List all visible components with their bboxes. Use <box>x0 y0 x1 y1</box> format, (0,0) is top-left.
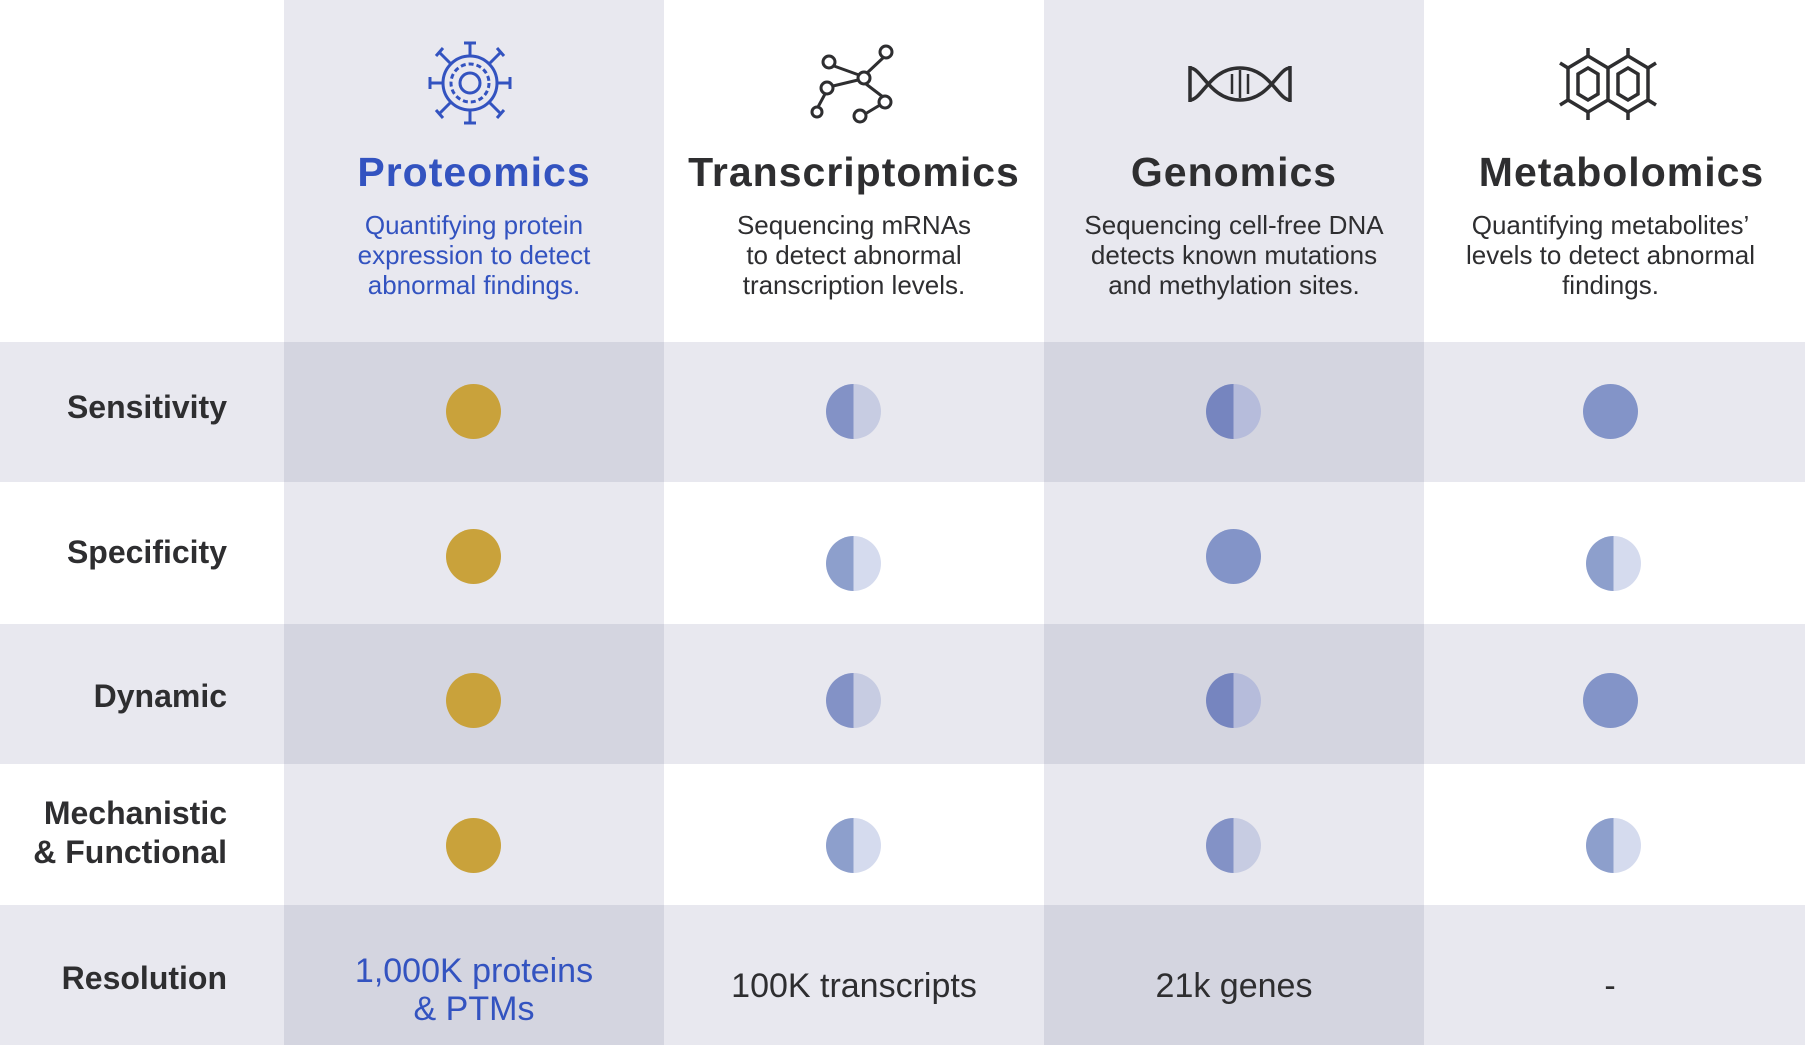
resolution: metabolomics: - <box>1604 967 1616 1005</box>
header: genomics <box>1084 66 1384 300</box>
heading: Proteomics <box>357 149 591 195</box>
resolution: transcriptomics: 100K transcripts <box>731 967 977 1005</box>
description: levels to detect abnormal <box>1466 240 1755 270</box>
icon: virus <box>428 42 512 124</box>
heading: Metabolomics <box>1479 149 1764 195</box>
heading: Genomics <box>1131 149 1337 195</box>
icon: network <box>810 44 894 124</box>
description: abnormal findings. <box>368 270 580 300</box>
header: transcriptomics <box>688 44 1020 300</box>
row label: Specificity: Specificity <box>67 534 227 570</box>
row label: Mechanistic & Functional: & Functional <box>33 834 227 870</box>
header: metabolomics <box>1466 48 1764 300</box>
row label: Dynamic: Dynamic <box>94 678 227 714</box>
description: Quantifying metabolites’ <box>1472 210 1749 240</box>
resolution: proteomics: & PTMs <box>414 990 534 1028</box>
description: expression to detect <box>358 240 590 270</box>
row label: Resolution: Resolution <box>62 960 227 996</box>
description: findings. <box>1562 270 1659 300</box>
row label: Sensitivity: Sensitivity <box>67 389 227 425</box>
resolution: proteomics <box>355 952 593 1028</box>
icon: hexagons <box>1559 48 1657 120</box>
description: Sequencing cell-free DNA <box>1084 210 1384 240</box>
proteomics dots <box>446 384 501 873</box>
description: Quantifying protein <box>365 210 583 240</box>
metabolomics dots <box>1583 384 1641 873</box>
description <box>1084 210 1384 300</box>
resolution: genomics: 21k genes <box>1156 967 1312 1005</box>
description <box>358 210 590 300</box>
description <box>1466 210 1755 300</box>
description: detects known mutations <box>1091 240 1377 270</box>
description: transcription levels. <box>743 270 965 300</box>
header: proteomics <box>357 42 591 300</box>
row label: Mechanistic & Functional: Mechanistic <box>44 795 227 831</box>
description <box>737 210 971 300</box>
heading: Transcriptomics <box>688 149 1020 195</box>
icon: DNA <box>1188 66 1292 102</box>
row label: Mechanistic & Functional <box>33 795 227 870</box>
genomics dots <box>1206 384 1261 873</box>
transcriptomics dots <box>826 384 881 873</box>
description: to detect abnormal <box>746 240 962 270</box>
description: and methylation sites. <box>1108 270 1360 300</box>
resolution: proteomics: 1,000K proteins <box>355 952 593 990</box>
description: Sequencing mRNAs <box>737 210 971 240</box>
